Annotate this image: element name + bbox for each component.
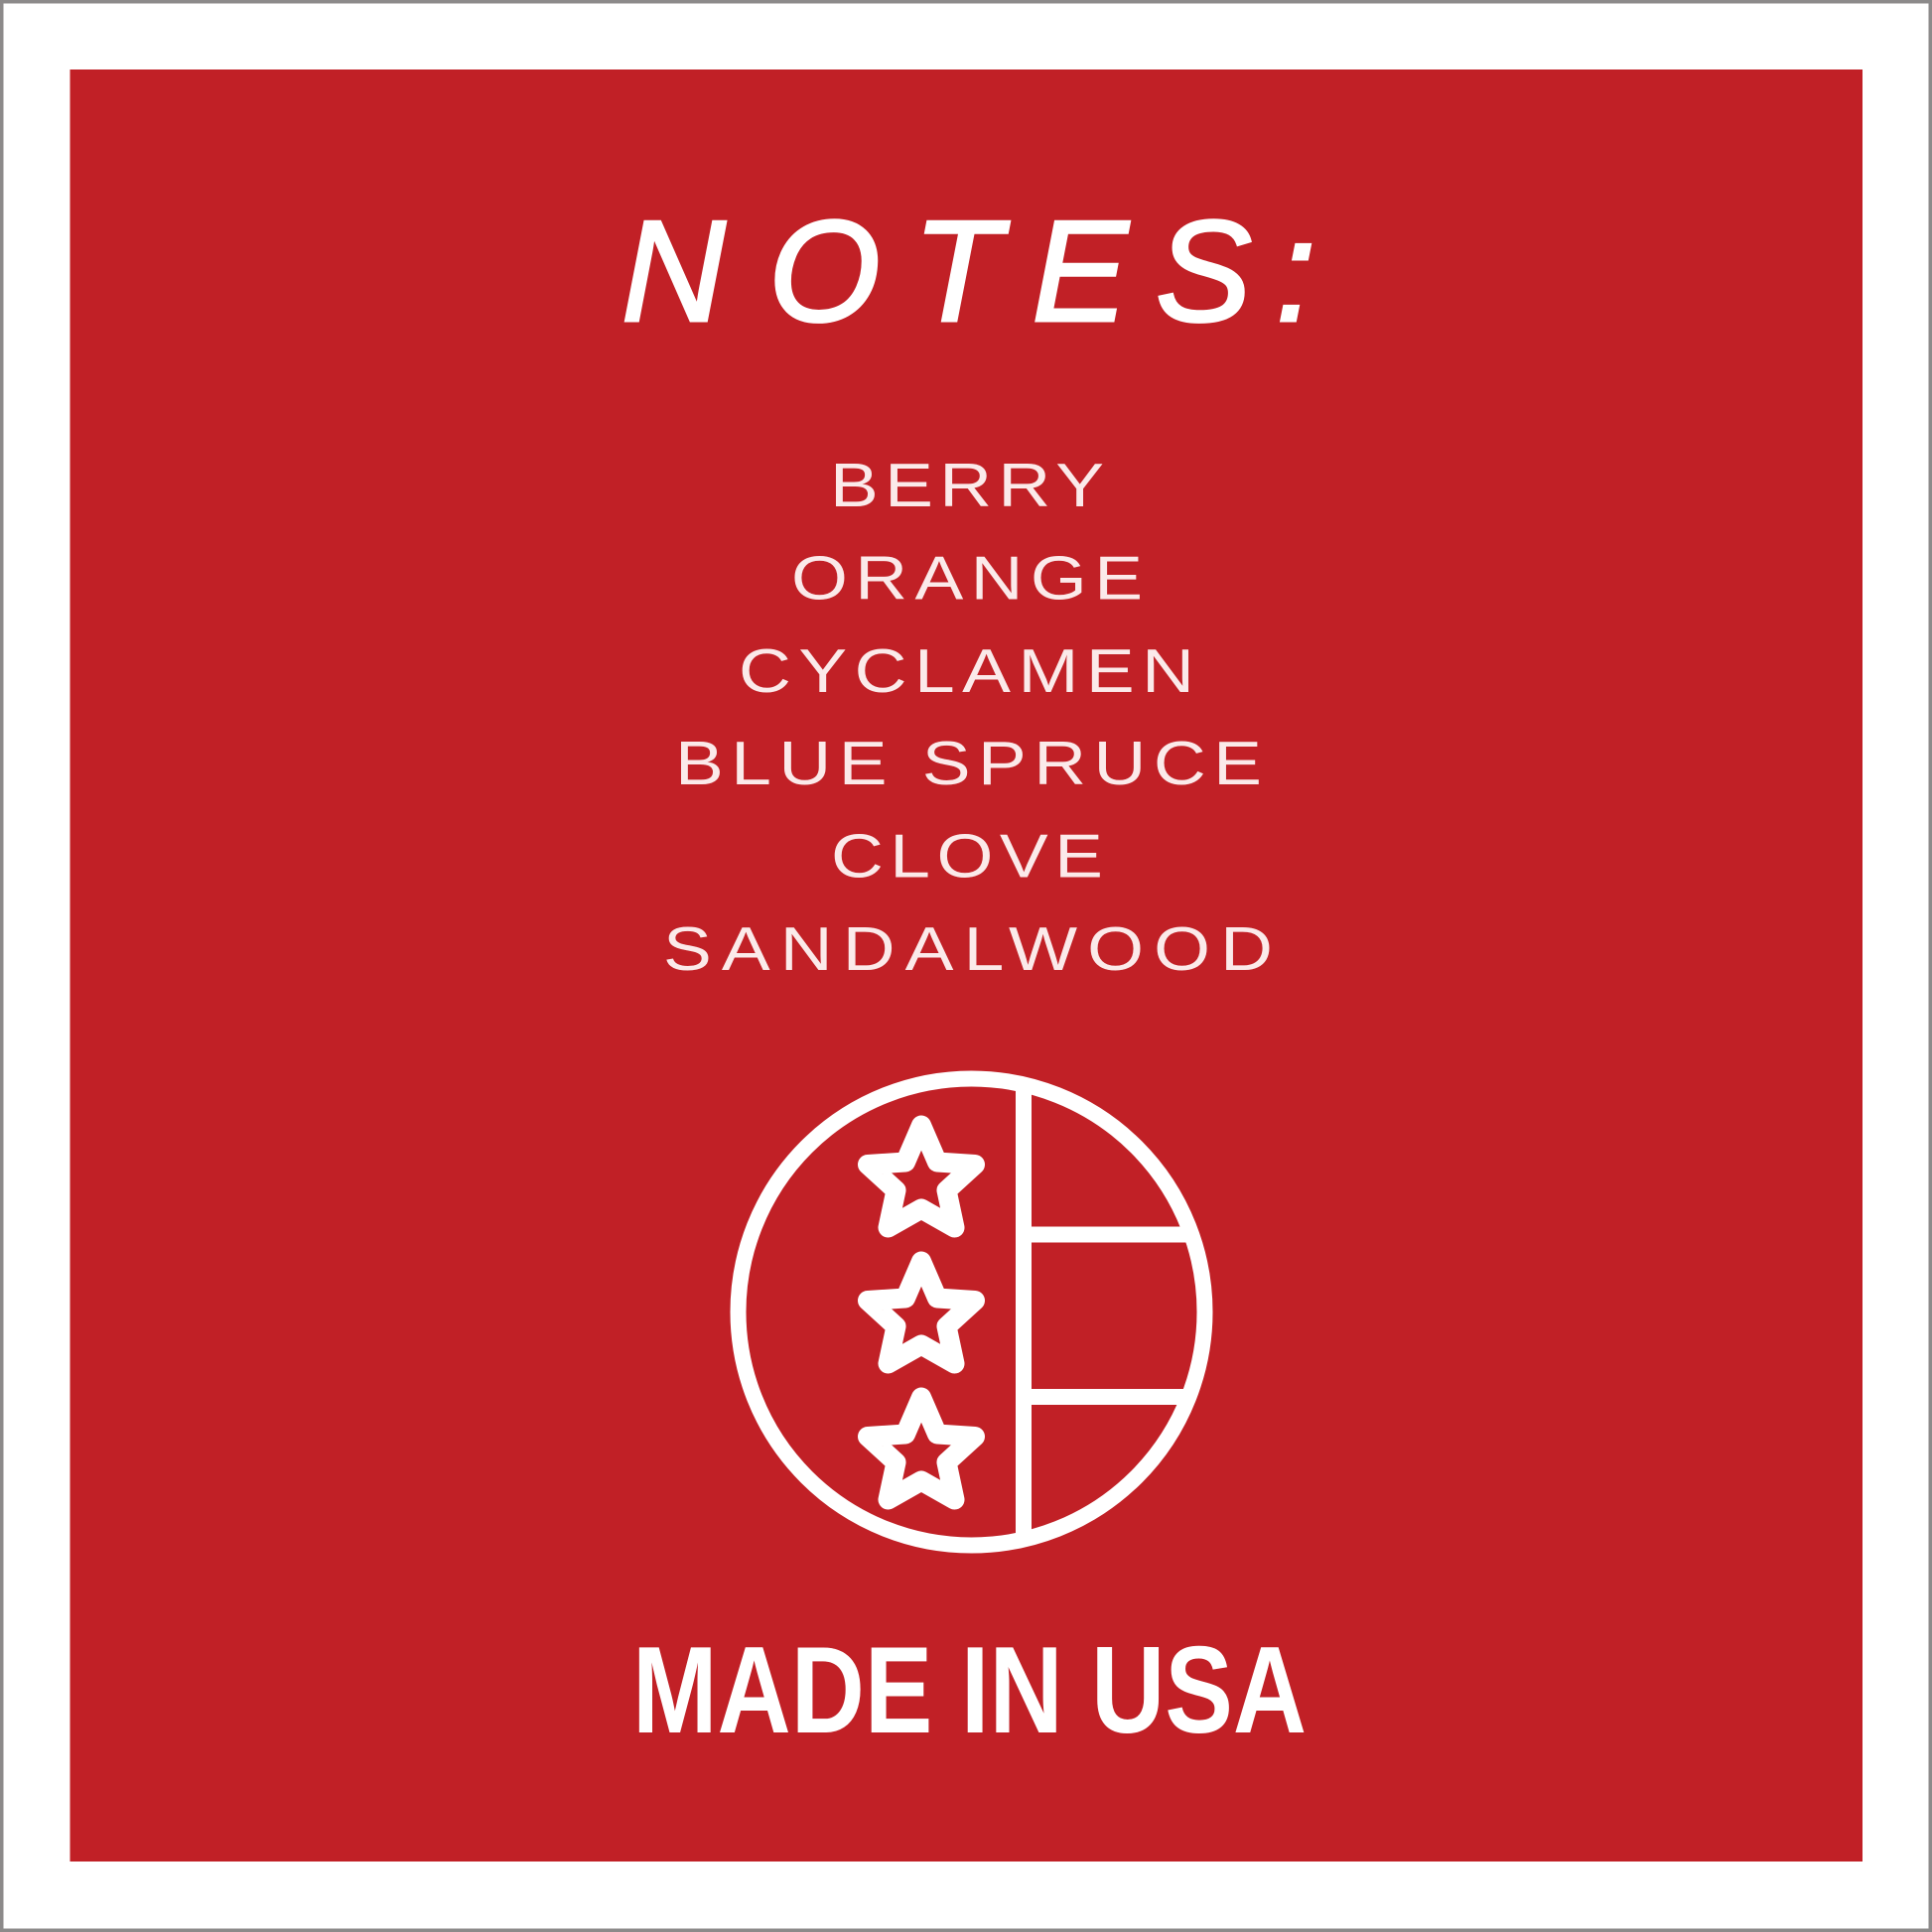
star: top bbox=[868, 1126, 975, 1227]
list: fragrance notes bbox=[663, 452, 1273, 984]
icon ring bbox=[739, 1078, 1205, 1545]
footer label: made in usa: MADE IN USA bbox=[632, 1622, 1307, 1759]
note: orange: ORANGE bbox=[791, 545, 1143, 613]
star: bottom bbox=[868, 1398, 975, 1499]
note: sandalwood: SANDALWOOD bbox=[663, 915, 1273, 984]
flag divider and stripes bbox=[1024, 1084, 1191, 1540]
star column bbox=[868, 1126, 975, 1499]
note: blue spruce: BLUE SPRUCE bbox=[675, 730, 1262, 798]
title: notes: NOTES: bbox=[621, 191, 1315, 351]
note: cyclamen: CYCLAMEN bbox=[739, 637, 1194, 706]
note: clove: CLOVE bbox=[831, 823, 1103, 891]
note: berry: BERRY bbox=[830, 452, 1104, 520]
icon: round american flag with stars bbox=[739, 1078, 1205, 1545]
star: middle bbox=[868, 1261, 975, 1364]
